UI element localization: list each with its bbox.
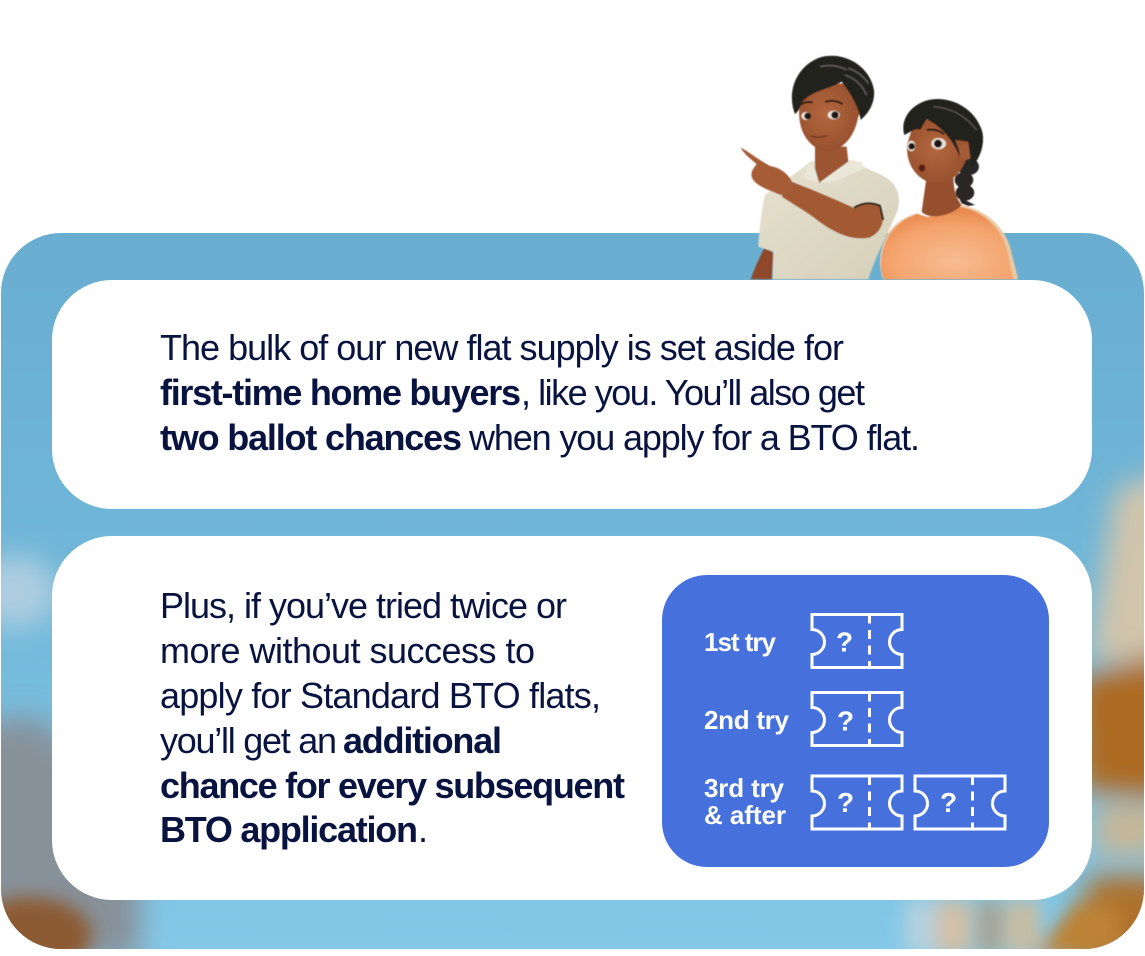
text: first-time buyers message: two ballot chances xyxy=(160,417,462,458)
woman xyxy=(880,99,1018,279)
text: additional chance message: BTO application xyxy=(160,809,418,850)
text: additional chance message: additional xyxy=(343,720,502,761)
icon: 3rd try second ticket: ? xyxy=(940,787,957,818)
icon: 1st try ticket: ? xyxy=(836,626,853,658)
text: first-time buyers message xyxy=(160,327,920,458)
panel: blurred background xyxy=(0,233,1145,956)
text: additional chance message: you’ll get an xyxy=(160,720,337,761)
panel: first-time buyers card xyxy=(52,280,1092,509)
label: 1st try: 1st try xyxy=(704,627,777,657)
icon: 3rd try first ticket: ? xyxy=(837,787,854,818)
text: additional chance message xyxy=(160,585,625,850)
text: first-time buyers message: when you apply for a BTO flat. xyxy=(468,417,920,458)
text: additional chance message: Plus, if you’ve tried twice or xyxy=(160,585,567,626)
text: additional chance message: more without success to xyxy=(160,630,535,671)
text: additional chance message: chance for every subsequent xyxy=(160,765,625,806)
text: first-time buyers message: , like you. You’ll also get xyxy=(521,372,865,413)
illustration: two people xyxy=(741,56,1018,279)
label: 3rd try and after: & after xyxy=(704,800,786,830)
man xyxy=(741,56,899,279)
icon: 3rd try second ticket xyxy=(915,776,1005,829)
panel: ballot ticket diagram xyxy=(662,575,1049,867)
icon: 3rd try first ticket xyxy=(812,776,902,829)
text: first-time buyers message: The bulk of our new flat supply is set aside for xyxy=(160,327,844,368)
icon: 2nd try ticket xyxy=(812,692,902,746)
label: 2nd try: 2nd try xyxy=(704,705,790,735)
label: 3rd try and after xyxy=(704,773,786,830)
label: 3rd try and after: 3rd try xyxy=(704,773,785,803)
text: additional chance message: apply for Standard BTO flats, xyxy=(160,675,601,716)
text: first-time buyers message: first-time home buyers xyxy=(160,372,521,413)
text: additional chance message: . xyxy=(418,809,428,850)
icon: 2nd try ticket: ? xyxy=(837,706,854,736)
icon: 1st try ticket xyxy=(812,614,902,668)
panel: additional chance card xyxy=(52,536,1092,900)
